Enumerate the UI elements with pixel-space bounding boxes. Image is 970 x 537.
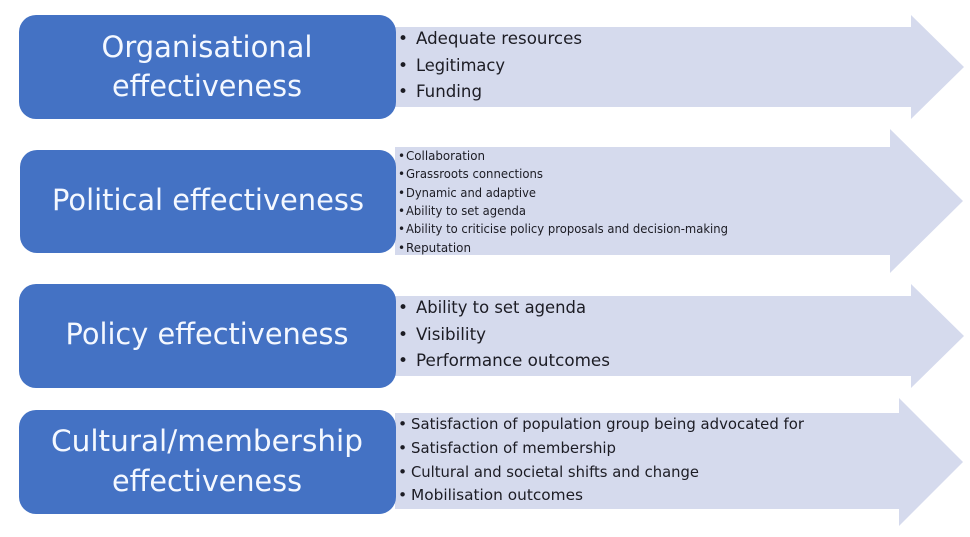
list: political: • [398,241,405,255]
list: political: Grassroots connections [406,167,543,181]
list: cultural [398,415,805,504]
list: organisational: • [398,56,408,76]
panel: policy effectiveness [19,284,964,388]
list: organisational: • [398,82,408,102]
list: political: Collaboration [406,149,485,163]
list: policy: • [398,325,408,345]
arrow: organisational [395,15,964,119]
list: organisational: Funding [416,82,482,102]
arrow: cultural [395,398,963,526]
list: cultural: Mobilisation outcomes [411,486,583,504]
list: cultural: • [398,486,407,504]
list: political: • [398,222,405,236]
arrow: policy [395,284,964,388]
list: political: Ability to criticise policy proposals and decision-making [406,222,728,236]
list: policy: Performance outcomes [416,351,610,371]
list: political: Ability to set agenda [406,204,526,218]
heading: cultural: Cultural/membership [51,424,363,458]
heading box: organisational [19,15,396,119]
arrow: political [395,129,963,273]
list: political: • [398,149,405,163]
list: policy: Visibility [416,325,486,345]
heading: policy: Policy effectiveness [66,317,348,351]
list: organisational [398,29,582,102]
list: cultural: • [398,415,407,433]
panel: organisational effectiveness [19,15,964,119]
list: organisational: • [398,29,408,49]
heading: political: Political effectiveness [52,183,364,217]
list: organisational: Legitimacy [416,56,505,76]
list: political: Reputation [406,241,471,255]
panel: cultural/membership effectiveness [19,398,963,526]
list: political: • [398,167,405,181]
list: policy: • [398,351,408,371]
panel: political effectiveness [20,129,963,273]
list: cultural: Satisfaction of population group being advocated for [411,415,805,433]
list: political [398,149,728,255]
list: organisational: Adequate resources [416,29,582,49]
heading line 2: cultural: effectiveness [112,464,302,498]
list: cultural: • [398,439,407,457]
list: cultural: • [398,463,407,481]
heading line 2: organisational: effectiveness [112,69,302,103]
list: cultural: Satisfaction of membership [411,439,616,457]
heading box: cultural [19,410,396,514]
list: policy [398,298,610,371]
heading box: political [20,150,396,253]
heading: organisational: Organisational [102,30,312,64]
list: policy: Ability to set agenda [416,298,586,318]
list: policy: • [398,298,408,318]
list: political: Dynamic and adaptive [406,186,536,200]
list: cultural: Cultural and societal shifts and change [411,463,699,481]
heading box: policy [19,284,396,388]
list: political: • [398,186,405,200]
list: political: • [398,204,405,218]
